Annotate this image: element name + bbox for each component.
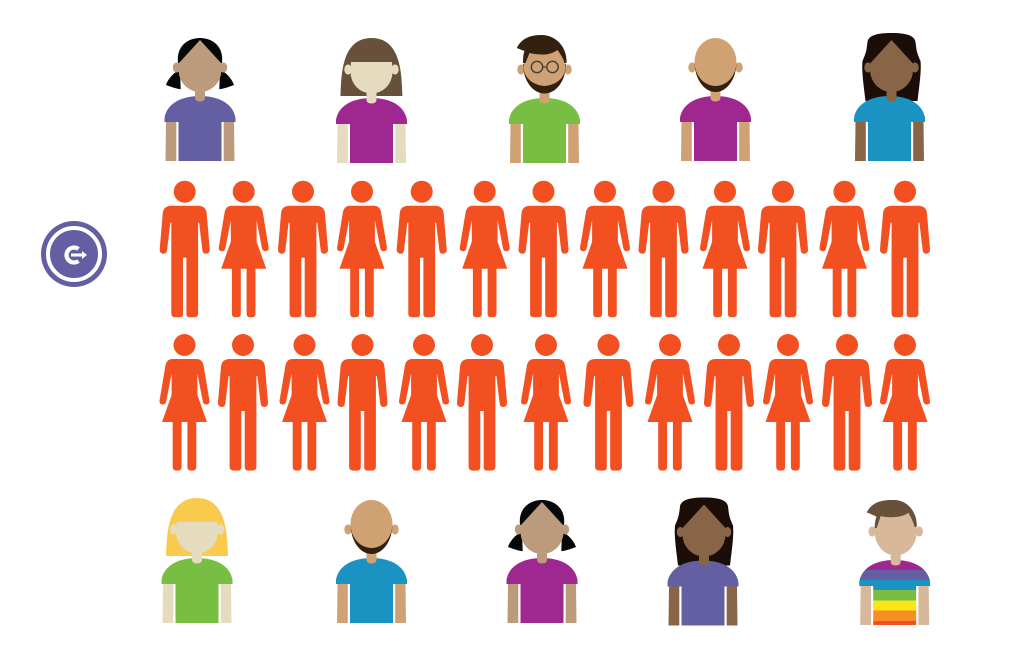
figure: man (822, 334, 872, 471)
avatar: bald man with beard, blue shirt (336, 500, 407, 623)
figure: woman (337, 181, 387, 317)
avatar: bald man with beard, magenta shirt (680, 38, 751, 161)
avatar: woman with long dark hair, purple shirt (668, 498, 738, 626)
figure: man (337, 334, 388, 471)
figure: woman (521, 334, 571, 471)
avatar: woman with blonde bob, green shirt (162, 498, 232, 623)
second row of orange figures (159, 334, 930, 471)
figure: woman (580, 181, 630, 317)
figure: woman (880, 334, 930, 471)
figure: woman (700, 181, 750, 317)
figure: man (518, 181, 569, 317)
avatar: bearded man with glasses, green shirt (509, 35, 580, 163)
figure: woman (279, 334, 330, 471)
first row of orange figures (160, 181, 930, 317)
figure: woman (219, 181, 269, 317)
avatar: woman with black pigtails, magenta shirt (506, 500, 578, 623)
figure: man (397, 181, 447, 317)
figure: woman (159, 334, 210, 471)
avatar: woman with long dark hair, blue shirt (854, 33, 925, 161)
figure: man (457, 334, 507, 471)
figure: woman (819, 181, 870, 317)
avatar: woman with brown bob, magenta shirt (336, 38, 407, 163)
figure: man (704, 334, 754, 471)
figure: man (638, 181, 689, 317)
figure: man (278, 181, 328, 317)
figure: woman (460, 181, 510, 317)
figure: woman (763, 334, 813, 471)
figure: woman (645, 334, 695, 471)
figure: man (758, 181, 808, 317)
figure: man (583, 334, 634, 471)
figure: woman (399, 334, 449, 471)
figure: man (160, 181, 210, 317)
figure: man (880, 181, 930, 317)
avatar: person with short hair, rainbow shirt (859, 500, 931, 625)
figure: man (218, 334, 268, 471)
avatar: woman with black pigtails, purple shirt (164, 38, 236, 161)
icon: purple circular logo (41, 221, 107, 287)
